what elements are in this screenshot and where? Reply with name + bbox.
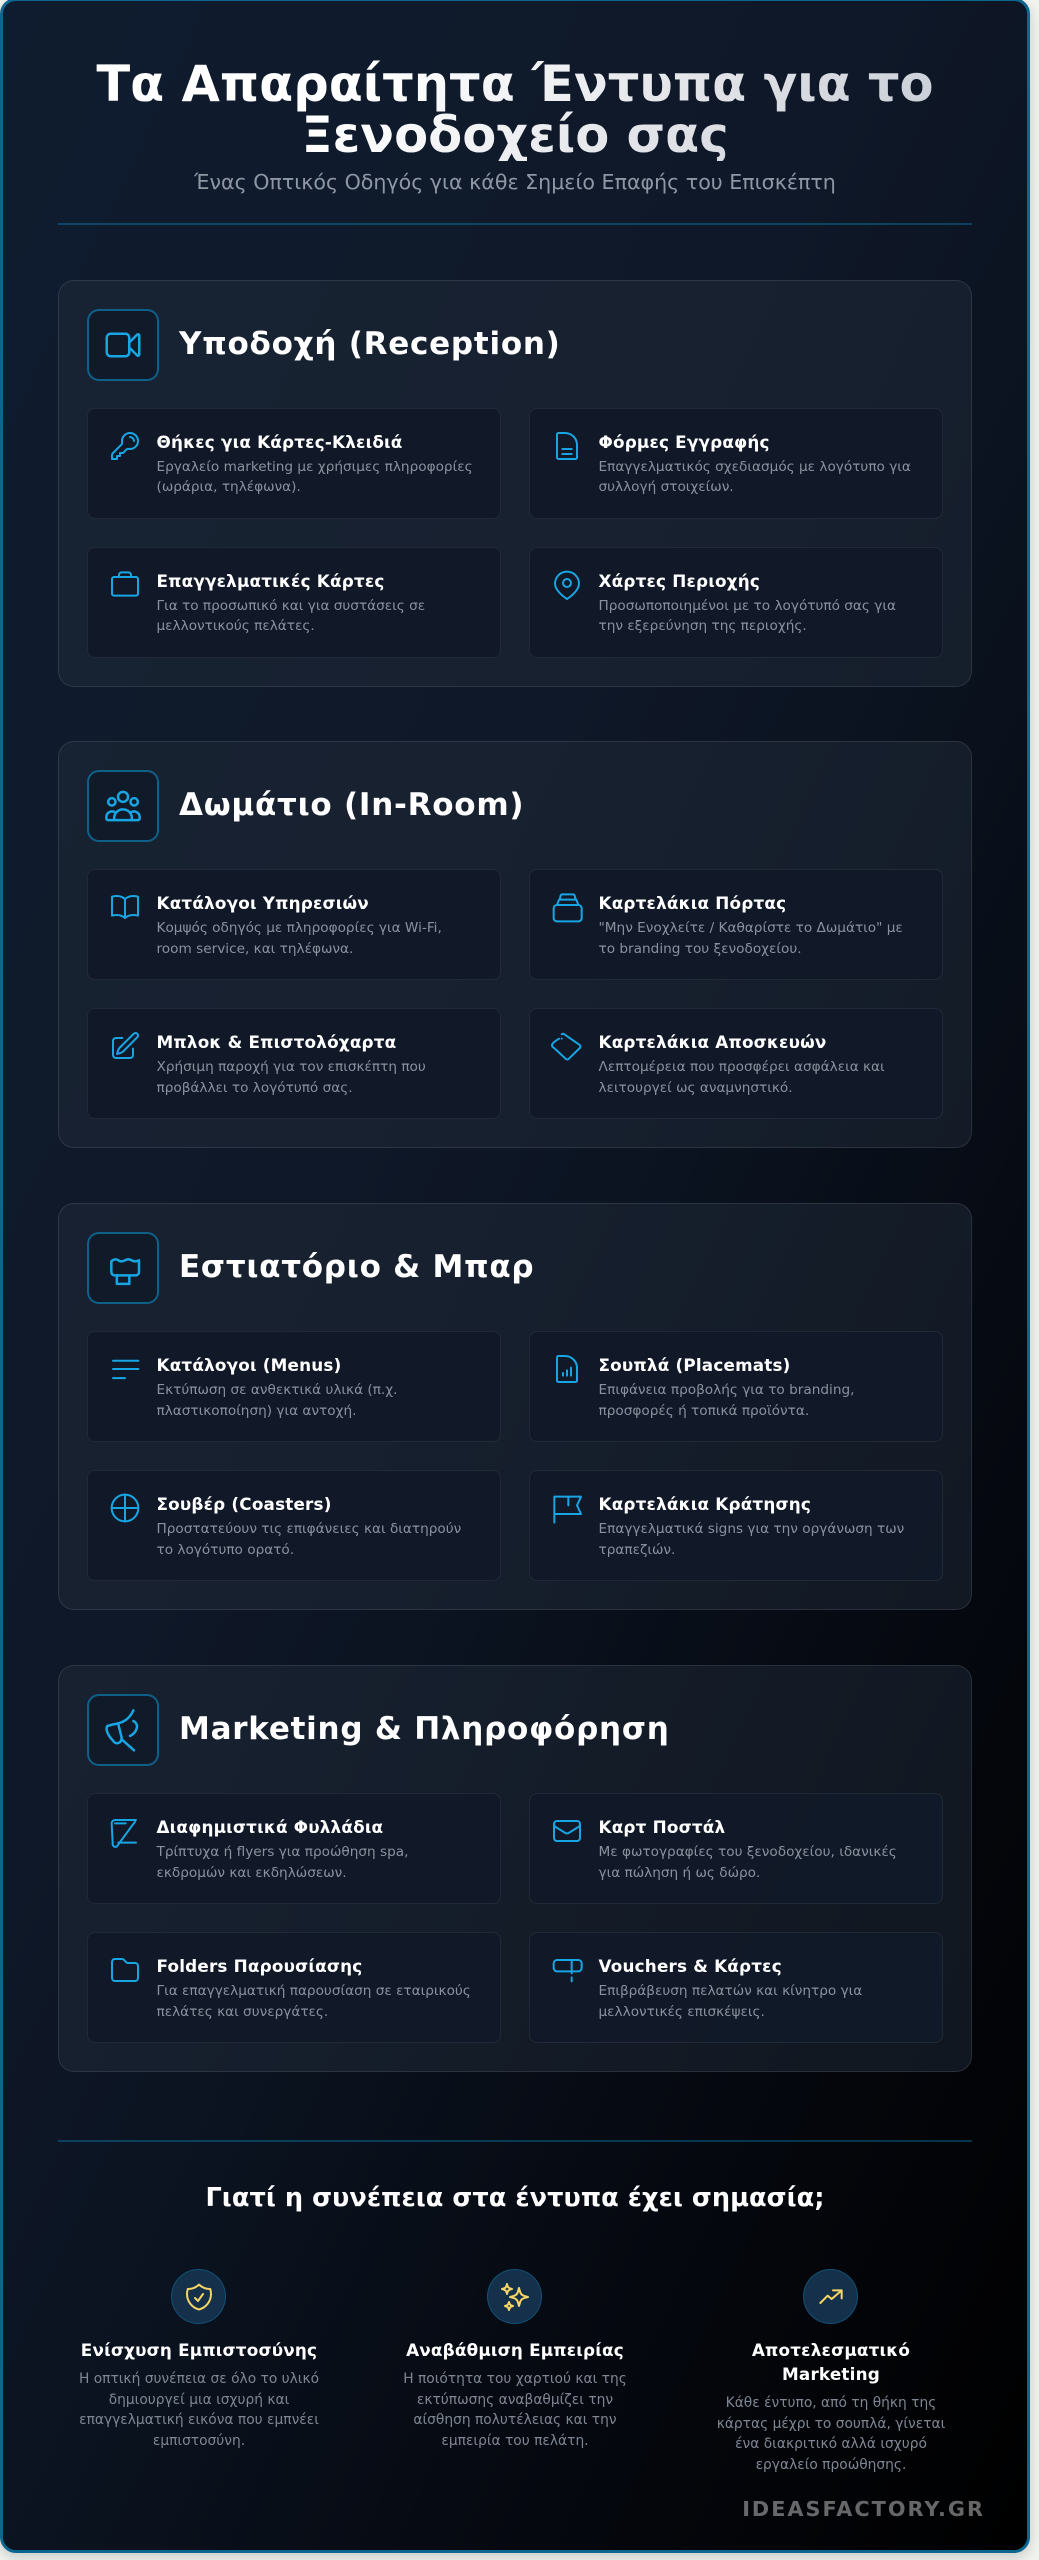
heading: why consistency matters: Γιατί η συνέπεια στα έντυπα έχει σημασία; (205, 2183, 825, 2213)
card: coasters: Σουβέρ (Coasters) (156, 1494, 332, 1514)
heading: restaurant and bar: Εστιατόριο & Μπαρ (179, 1249, 534, 1285)
card: service directories (87, 869, 501, 980)
card: luggage tags: Λεπτομέρεια που προσφέρει ασφάλεια και (598, 1059, 885, 1075)
card: door hangers: "Μην Ενοχλείτε / Καθαρίστε το Δωμάτιο" με (598, 920, 903, 936)
card: menus: Εκτύπωση σε ανθεκτικά υλικά (π.χ. (156, 1382, 397, 1398)
card: business cards: μελλοντικούς πελάτες. (156, 618, 315, 634)
card: postcards: Καρτ Ποστάλ (598, 1817, 725, 1837)
card: area maps (529, 547, 943, 658)
benefit text: αίσθηση πολυτέλειας και την (413, 2412, 617, 2428)
card: coasters: Προστατεύουν τις επιφάνειες και διατηρούν (156, 1521, 461, 1537)
card: door hangers: Καρτελάκια Πόρτας (598, 893, 786, 913)
title (0, 59, 1030, 161)
benefit title: Αναβάθμιση Εμπειρίας (406, 2340, 624, 2360)
icon: people group (87, 770, 159, 842)
panel: reception (58, 280, 972, 687)
card: luggage tags: Καρτελάκια Αποσκευών (598, 1032, 827, 1052)
card: business cards: Επαγγελματικές Κάρτες (156, 571, 385, 591)
card: key card holders: Θήκες για Κάρτες-Κλειδιά (156, 432, 403, 452)
benefit: marketing (717, 2269, 945, 2473)
heading: in-room: Δωμάτιο (In-Room) (179, 787, 524, 823)
card: menus: πλαστικοποίηση) για αντοχή. (156, 1403, 356, 1419)
card: registration forms (529, 408, 943, 519)
card: service directories: room service, και τηλέφωνα. (156, 941, 353, 957)
benefit: trust (79, 2269, 319, 2449)
benefit text: επαγγελματική εικόνα που εμπνέει (79, 2412, 319, 2428)
card: reservation signs (529, 1470, 943, 1581)
card: postcards: για πώληση ή ως δώρο. (598, 1865, 760, 1881)
card: coasters (87, 1470, 501, 1581)
benefit text: εκτύπωσης αναβαθμίζει την (417, 2392, 613, 2408)
icon: sparkles (487, 2269, 542, 2324)
benefit title: Αποτελεσματικό (752, 2340, 910, 2360)
benefit text: Η οπτική συνέπεια σε όλο το υλικό (79, 2371, 319, 2387)
benefit text: εργαλείο προώθησης. (756, 2457, 906, 2473)
card: business cards (87, 547, 501, 658)
icon: restaurant (87, 1232, 159, 1304)
card: key card holders: Εργαλείο marketing με χρήσιμες πληροφορίες (156, 458, 473, 474)
card: key card holders (87, 408, 501, 519)
card: placemats: προσφορές ή τοπικά προϊόντα. (598, 1403, 809, 1419)
card: coasters: το λογότυπο ορατό. (156, 1542, 294, 1558)
icon: trend arrow (803, 2269, 858, 2324)
title: Τα Απαραίτητα Έντυπα για το (96, 55, 934, 113)
benefit text (717, 2395, 945, 2473)
card: presentation folders: πελάτες και συνεργάτες. (156, 2004, 328, 2020)
icon: shield (171, 2269, 226, 2324)
card: area maps: Προσωποποιημένοι με το λογότυπό σας για (598, 598, 896, 614)
card: notepads and letterheads: Χρήσιμη παροχή για τον επισκέπτη που (156, 1059, 426, 1075)
icon: megaphone (87, 1694, 159, 1766)
card: registration forms: συλλογή στοιχείων. (598, 479, 734, 495)
card: menus: Κατάλογοι (Menus) (156, 1355, 341, 1375)
card: area maps: την εξερεύνηση της περιοχής. (598, 618, 807, 634)
card: key card holders: (ωράρια, τηλέφωνα). (156, 479, 301, 495)
icon: video camera (87, 309, 159, 381)
card: placemats: Επιφάνεια προβολής για το branding, (598, 1382, 854, 1398)
panel: marketing and information (58, 1665, 972, 2072)
card: presentation folders: Για επαγγελματική παρουσίαση σε εταιρικούς (156, 1983, 471, 1999)
benefit title: Ενίσχυση Εμπιστοσύνης (81, 2340, 317, 2360)
card: service directories: Κατάλογοι Υπηρεσιών (156, 893, 369, 913)
card: notepads and letterheads: Μπλοκ & Επιστολόχαρτα (156, 1032, 396, 1052)
card: flyers: Διαφημιστικά Φυλλάδια (156, 1817, 383, 1837)
benefit text: κάρτας μέχρι το σουπλά, γίνεται (717, 2416, 945, 2432)
benefit: experience (403, 2269, 627, 2449)
title: Ξενοδοχείο σας (301, 106, 729, 164)
card: reservation signs: Επαγγελματικά signs για την οργάνωση των (598, 1521, 904, 1537)
benefit title: Marketing (782, 2364, 880, 2384)
card: flyers: Τρίπτυχα ή flyers για προώθηση spa, (156, 1844, 408, 1860)
card: placemats: Σουπλά (Placemats) (598, 1355, 791, 1375)
benefit text (403, 2371, 627, 2449)
card: placemats (529, 1331, 943, 1442)
card: flyers: εκδρομών και εκδηλώσεων. (156, 1865, 347, 1881)
benefit title (752, 2340, 910, 2384)
subtitle: Ένας Οπτικός Οδηγός για κάθε Σημείο Επαφής του Επισκέπτη (194, 170, 836, 194)
card: presentation folders (87, 1932, 501, 2043)
card: presentation folders: Folders Παρουσίασης (156, 1956, 362, 1976)
brand footer: IDEASFACTORY.GR (742, 2497, 985, 2521)
card: door hangers: το branding του ξενοδοχείου. (598, 941, 802, 957)
card: door hangers (529, 869, 943, 980)
benefit text: Η ποιότητα του χαρτιού και της (403, 2371, 627, 2387)
card: service directories: Κομψός οδηγός με πληροφορίες για Wi-Fi, (156, 920, 442, 936)
benefit text (79, 2371, 319, 2449)
card: registration forms: Επαγγελματικός σχεδιασμός με λογότυπο για (598, 458, 911, 474)
card: vouchers (529, 1932, 943, 2043)
card: notepads and letterheads (87, 1008, 501, 1119)
panel: in-room (58, 741, 972, 1148)
benefit text: εμπειρία του πελάτη. (441, 2433, 589, 2449)
heading: marketing and information: Marketing & Πληροφόρηση (179, 1711, 670, 1747)
panel: restaurant and bar (58, 1203, 972, 1610)
card: business cards: Για το προσωπικό και για συστάσεις σε (156, 598, 425, 614)
card: vouchers: μελλοντικές επισκέψεις. (598, 2004, 765, 2020)
card: luggage tags (529, 1008, 943, 1119)
card: registration forms: Φόρμες Εγγραφής (598, 432, 770, 452)
benefit text: ένα διακριτικό αλλά ισχυρό (735, 2436, 927, 2452)
benefit text: εμπιστοσύνη. (153, 2433, 245, 2449)
benefit text: δημιουργεί μια ισχυρή και (109, 2392, 289, 2408)
heading: reception: Υποδοχή (Reception) (179, 326, 561, 362)
card: luggage tags: λειτουργεί ως αναμνηστικό. (598, 1080, 793, 1096)
card: reservation signs: Καρτελάκια Κράτησης (598, 1494, 811, 1514)
card: reservation signs: τραπεζιών. (598, 1542, 675, 1558)
card: notepads and letterheads: προβάλλει το λογότυπό σας. (156, 1080, 353, 1096)
card: vouchers: Επιβράβευση πελατών και κίνητρο για (598, 1983, 862, 1999)
card: menus (87, 1331, 501, 1442)
card: postcards: Με φωτογραφίες του ξενοδοχείου, ιδανικές (598, 1844, 897, 1860)
card: postcards (529, 1793, 943, 1904)
benefit text: Κάθε έντυπο, από τη θήκη της (726, 2395, 936, 2411)
card: flyers (87, 1793, 501, 1904)
card: area maps: Χάρτες Περιοχής (598, 571, 760, 591)
card: vouchers: Vouchers & Κάρτες (598, 1956, 782, 1976)
